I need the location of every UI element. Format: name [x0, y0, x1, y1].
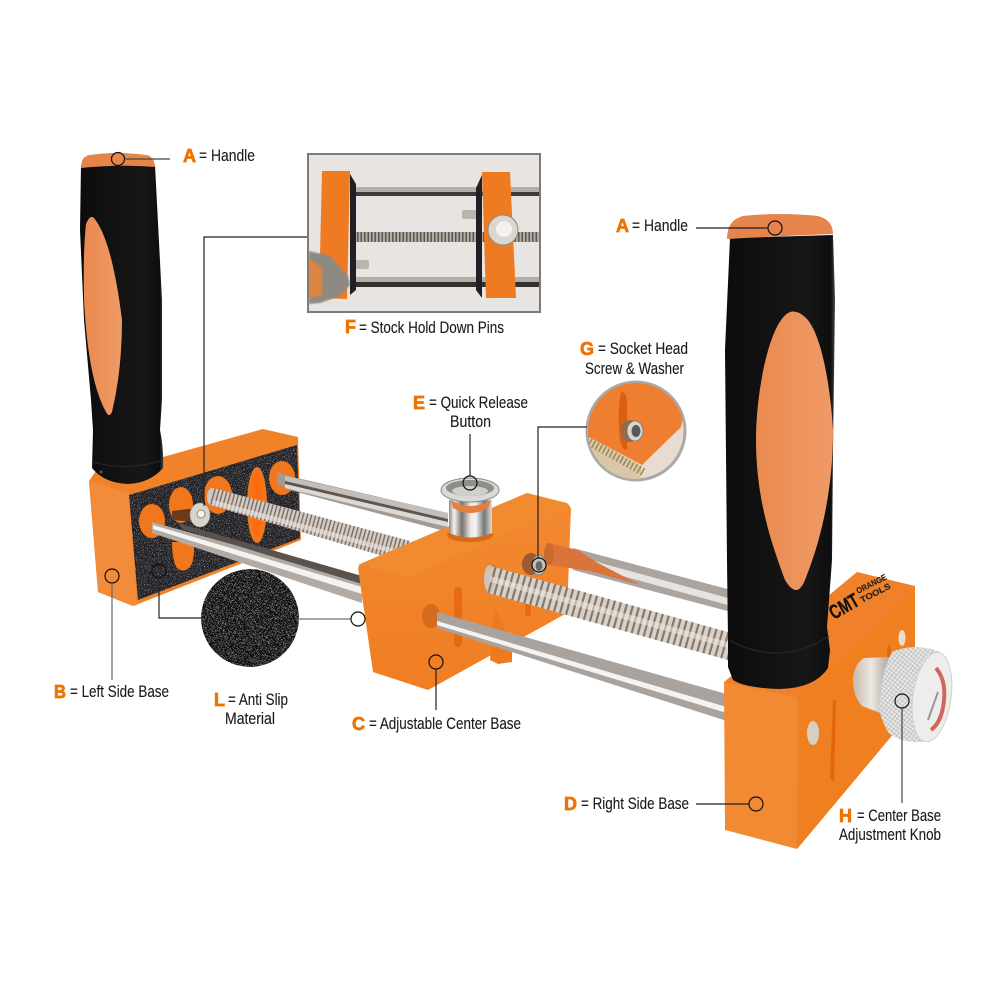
socket screw on center base	[522, 553, 546, 575]
inset thumb	[309, 251, 350, 304]
callout: C adjustable center base	[352, 655, 521, 734]
callout: D right side base: = Right Side Base	[581, 795, 689, 813]
right base front face	[724, 682, 798, 849]
right handle	[725, 214, 835, 689]
callout: A handle left: = Handle	[199, 147, 255, 165]
plate holes and slots	[139, 461, 295, 570]
callout: A handle right: A	[616, 216, 629, 236]
right side base	[724, 572, 915, 849]
callout: L anti slip material: Material	[225, 710, 275, 728]
callout: H center base adjustment knob: H	[839, 806, 852, 826]
right base side face	[797, 590, 915, 849]
inset circle: socket head screw	[585, 380, 690, 480]
center base top face	[358, 493, 570, 577]
callout: G socket head screw: Screw & Washer	[585, 360, 684, 378]
inset screw	[488, 215, 518, 245]
inset circle: anti slip material	[201, 569, 299, 667]
callout: G socket head screw: G	[580, 339, 594, 359]
front rod right segment	[437, 612, 730, 722]
quick release button	[441, 478, 499, 542]
back rod left segment	[277, 472, 448, 532]
callout: A handle right: = Handle	[632, 217, 688, 235]
callout: A handle left	[112, 146, 255, 166]
handle grip	[756, 312, 833, 590]
callout: H center base adjustment knob: = Center Base	[857, 807, 941, 825]
left side base	[89, 429, 301, 606]
socket screw detail	[621, 420, 639, 442]
callout: F stock hold down pins: = Stock Hold Down Pins	[359, 319, 504, 337]
inset blocks	[319, 171, 350, 299]
right base slot and screw	[830, 700, 836, 782]
callout: D right side base: D	[564, 794, 577, 814]
inset dark plates	[350, 174, 356, 295]
callout: E quick release button: Button	[450, 413, 491, 431]
handle top cap	[727, 214, 833, 239]
adjustment knob	[853, 647, 957, 744]
callout: C adjustable center base: = Adjustable Center Base	[369, 715, 521, 733]
inset pins	[462, 210, 476, 219]
handle top cap	[81, 153, 155, 168]
callout: E quick release button: E	[413, 393, 425, 413]
callout: F stock hold down pins: F	[345, 317, 356, 337]
callout: C adjustable center base: C	[352, 714, 365, 734]
base front face	[89, 481, 137, 606]
callout: F stock hold down pins	[204, 237, 504, 506]
anti slip plate	[129, 445, 300, 600]
callout: E quick release button: = Quick Release	[429, 394, 528, 412]
callout: H center base adjustment knob	[839, 694, 941, 844]
left handle	[80, 153, 163, 484]
brand mark: ORANGE	[854, 572, 889, 596]
callout: B left side base	[54, 569, 169, 702]
callout: G socket head screw: = Socket Head	[598, 340, 688, 358]
brand mark: CMT	[826, 590, 863, 624]
callout: E quick release button	[413, 393, 528, 490]
callout: L anti slip material	[152, 564, 365, 728]
callout: A handle right	[616, 216, 782, 236]
brand mark	[826, 572, 893, 624]
hold down screw	[172, 503, 210, 527]
threaded rod left segment	[207, 488, 410, 556]
callout: L anti slip material: L	[214, 690, 225, 710]
brand mark: TOOLS	[858, 581, 893, 605]
callout: L anti slip material: = Anti Slip	[228, 691, 288, 709]
threaded rod right segment	[484, 565, 738, 662]
callout: H center base adjustment knob: Adjustment Knob	[839, 826, 941, 844]
inset rods	[356, 187, 539, 192]
front rod left segment	[152, 522, 362, 603]
center base foot	[490, 607, 512, 664]
inset photo: stock hold down pins	[308, 154, 540, 312]
callout: D right side base	[564, 794, 763, 814]
back rod right segment	[544, 543, 735, 613]
callout: B left side base: = Left Side Base	[70, 683, 169, 701]
callout: G socket head screw	[532, 339, 688, 572]
callout: B left side base: B	[54, 682, 66, 702]
center base slots	[454, 587, 462, 647]
callout: A handle left: A	[183, 146, 196, 166]
adjustable center base	[358, 493, 571, 690]
handle grip	[84, 217, 122, 415]
